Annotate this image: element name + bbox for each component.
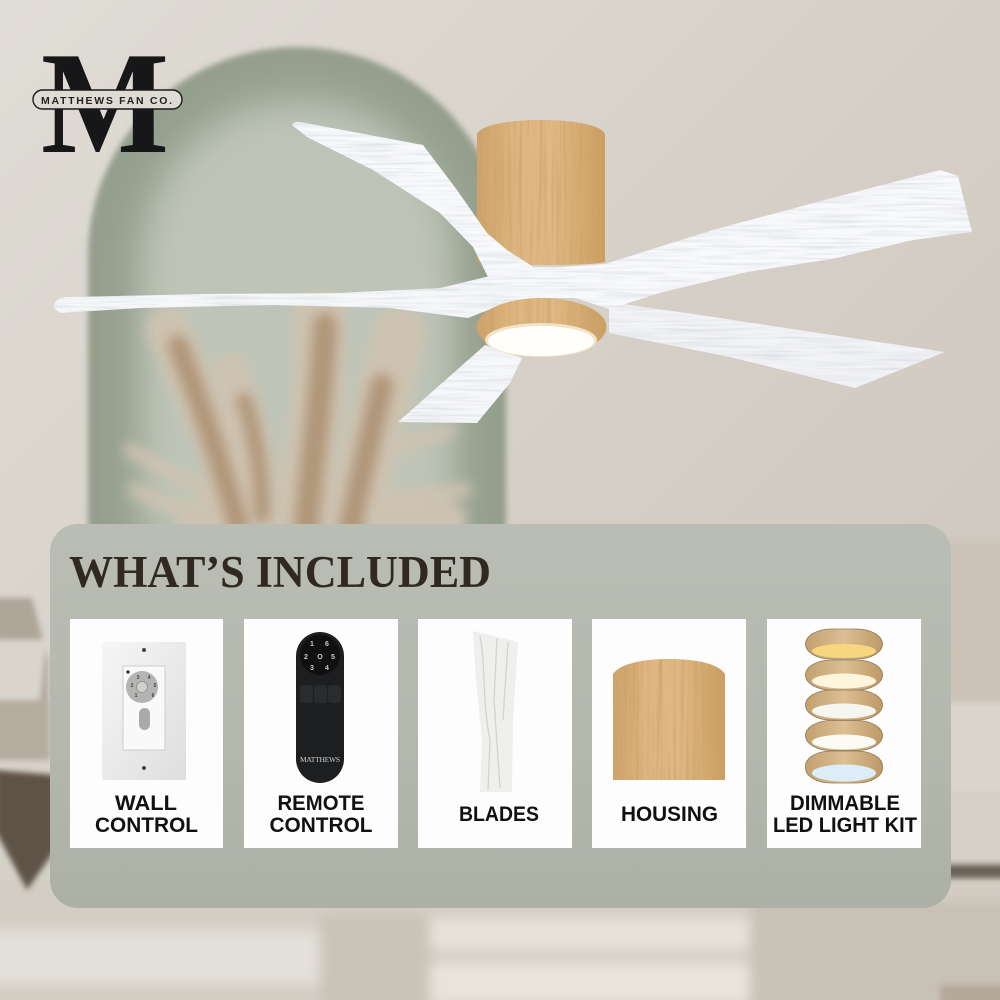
icon: wall control: 5 <box>154 683 157 689</box>
fan blade lower left <box>398 345 522 423</box>
icon: housing <box>613 659 725 780</box>
label: REMOTE <box>278 791 364 815</box>
arched wall niche <box>88 47 506 540</box>
fan housing <box>477 120 605 265</box>
label: WALL <box>115 791 177 815</box>
logo banner <box>33 90 182 109</box>
pampas grass decor <box>130 315 465 530</box>
card: housing <box>592 619 746 848</box>
fan blade upper right <box>530 170 972 309</box>
fan blade left <box>53 276 515 318</box>
left sofa and plant backdrop <box>0 598 55 890</box>
icon: wall control: 2 <box>131 683 134 689</box>
icon: remote: O <box>317 654 323 661</box>
icon: remote: MATTHEWS <box>300 755 340 764</box>
label: LED LIGHT KIT <box>773 813 917 837</box>
card: remote control <box>244 619 398 848</box>
icon: wall control: 6 <box>152 693 155 699</box>
icon: wall control: 4 <box>148 675 151 681</box>
icon: remote <box>296 632 344 783</box>
icon: wall control: 3 <box>137 675 140 681</box>
label: DIMMABLE <box>790 791 900 815</box>
right sofa backdrop <box>940 540 1000 1000</box>
heading: WHAT’S INCLUDED <box>69 547 491 597</box>
icon: remote: 5 <box>331 654 335 661</box>
icon: remote: 2 <box>304 654 308 661</box>
label: CONTROL <box>95 813 198 837</box>
icon: wall control: 1 <box>135 693 138 699</box>
card: wall control <box>70 619 223 848</box>
icon: remote: 6 <box>325 641 329 648</box>
icon: blade <box>473 631 518 792</box>
card: dimmable LED light kit <box>767 619 921 848</box>
icon: remote: 3 <box>310 665 314 672</box>
icon: light rings <box>806 629 882 783</box>
fan blade upper left <box>292 122 545 302</box>
LED light ring <box>476 298 606 357</box>
icon: remote: 1 <box>310 641 314 648</box>
label: HOUSING <box>621 802 718 826</box>
icon: wall control <box>102 642 186 780</box>
logo letter M: M <box>41 22 169 184</box>
ceiling fan <box>53 120 972 423</box>
panel: what's included <box>50 524 951 908</box>
logo banner: MATTHEWS FAN CO. <box>41 95 172 107</box>
card: blades <box>418 619 572 848</box>
logo <box>33 22 182 184</box>
icon: remote: 4 <box>325 665 329 672</box>
label: BLADES <box>459 802 539 826</box>
label: CONTROL <box>270 813 372 837</box>
fan blade lower right <box>609 302 945 388</box>
